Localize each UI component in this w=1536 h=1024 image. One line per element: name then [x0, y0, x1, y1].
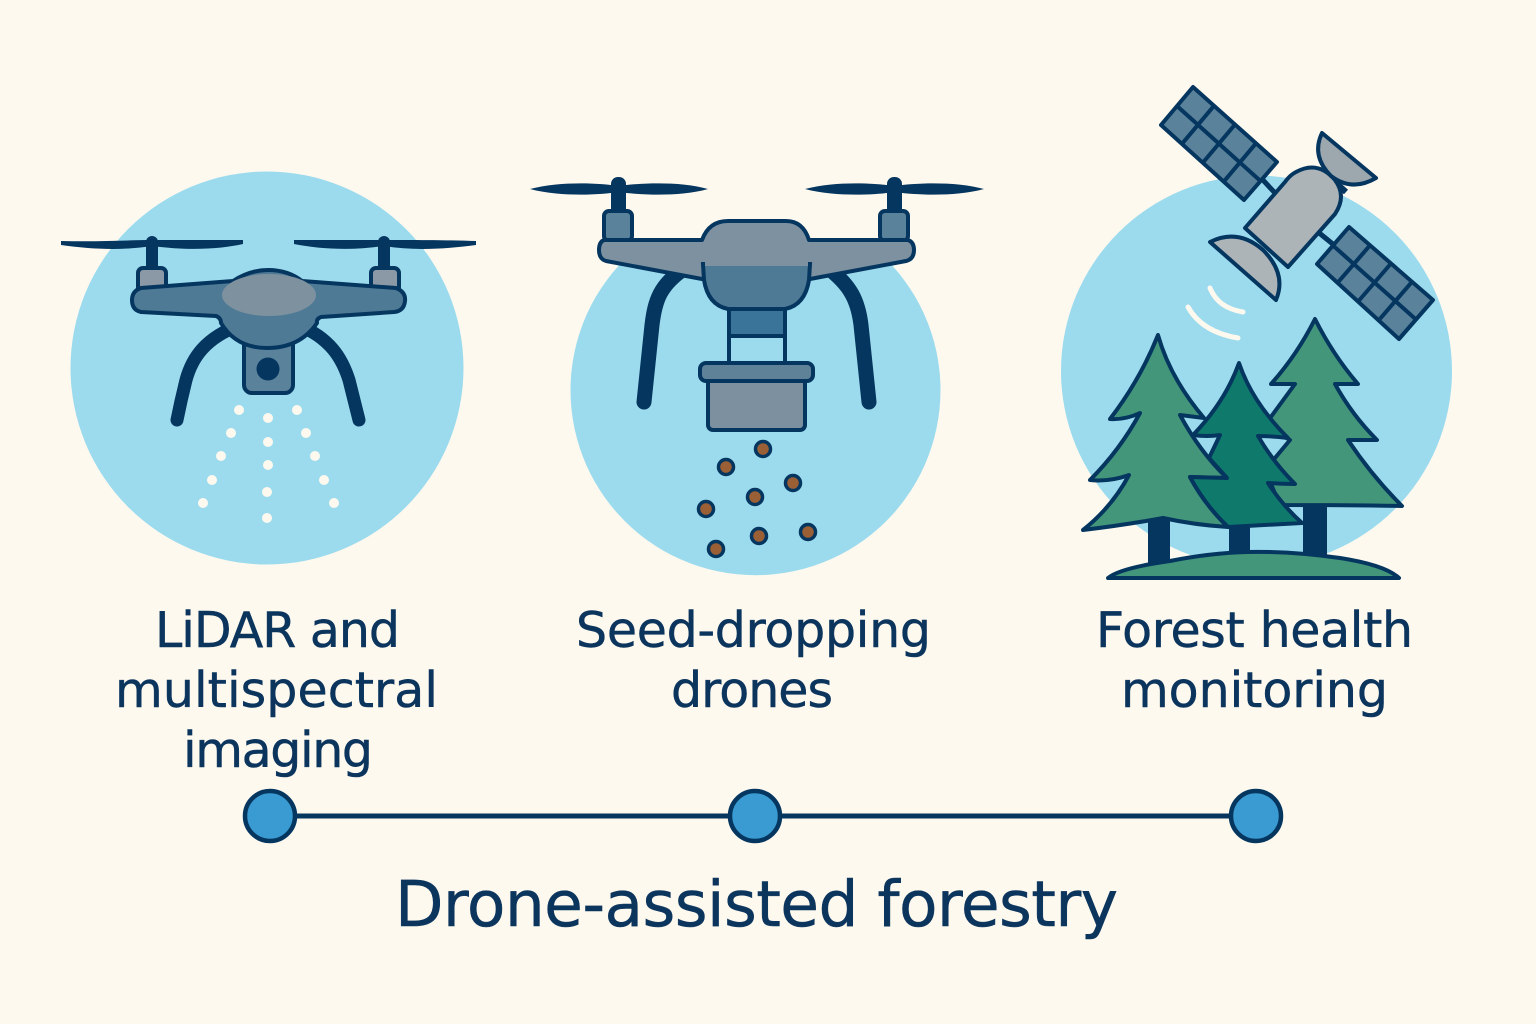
label: Forest health monitoring: [1096, 602, 1413, 719]
solar panel lower: [1317, 227, 1433, 339]
signal waves: [1188, 288, 1243, 338]
trees: [1083, 319, 1402, 578]
trunks: [1150, 500, 1325, 565]
timeline connector: [245, 791, 1281, 841]
right tree: [1265, 319, 1402, 506]
solar panel upper: [1161, 87, 1277, 200]
timeline node 1: [245, 791, 295, 841]
drone 1 legs: [177, 325, 359, 420]
drone 2 seed box and connector: [700, 305, 813, 430]
dish lower: [1210, 237, 1279, 300]
label: Seed-dropping drones: drones: [671, 662, 833, 719]
label: Seed-dropping drones: [576, 602, 931, 719]
satellite body: [1245, 168, 1341, 267]
drone 1 propellers: [61, 236, 476, 272]
drone 1 camera: [244, 335, 293, 393]
left tree: [1083, 335, 1228, 530]
icon: satellite over forest in circle: [1061, 87, 1452, 578]
icon: seed-dropping drone in circle: [530, 177, 984, 575]
middle tree: [1190, 363, 1302, 527]
label: LiDAR and multispectral imaging: LiDAR and: [155, 602, 400, 659]
dish upper: [1318, 133, 1376, 185]
label: Seed-dropping drones: Seed-dropping: [576, 602, 931, 659]
icon: LiDAR drone in circle: [61, 172, 476, 564]
drone 1 body: [132, 270, 405, 348]
drone 2 body: [599, 221, 914, 279]
LiDAR beam dots: [198, 405, 339, 523]
label: LiDAR and multispectral imaging: [115, 602, 438, 779]
timeline node 2: [730, 791, 780, 841]
drone 2 propellers: [530, 177, 984, 217]
satellite: [1161, 87, 1433, 339]
label: LiDAR and multispectral imaging: imaging: [183, 722, 373, 779]
dish connectors: [1256, 182, 1346, 257]
label: LiDAR and multispectral imaging: multispectral: [115, 662, 438, 719]
drone 2 legs: [644, 268, 869, 402]
title: Drone-assisted forestry: [395, 868, 1118, 941]
label: Forest health monitoring: monitoring: [1121, 662, 1388, 719]
label: Forest health monitoring: Forest health: [1096, 602, 1413, 659]
drone 2 lower body: [703, 264, 810, 309]
ground: [1108, 552, 1399, 578]
timeline node 3: [1231, 791, 1281, 841]
seeds: [698, 442, 816, 556]
